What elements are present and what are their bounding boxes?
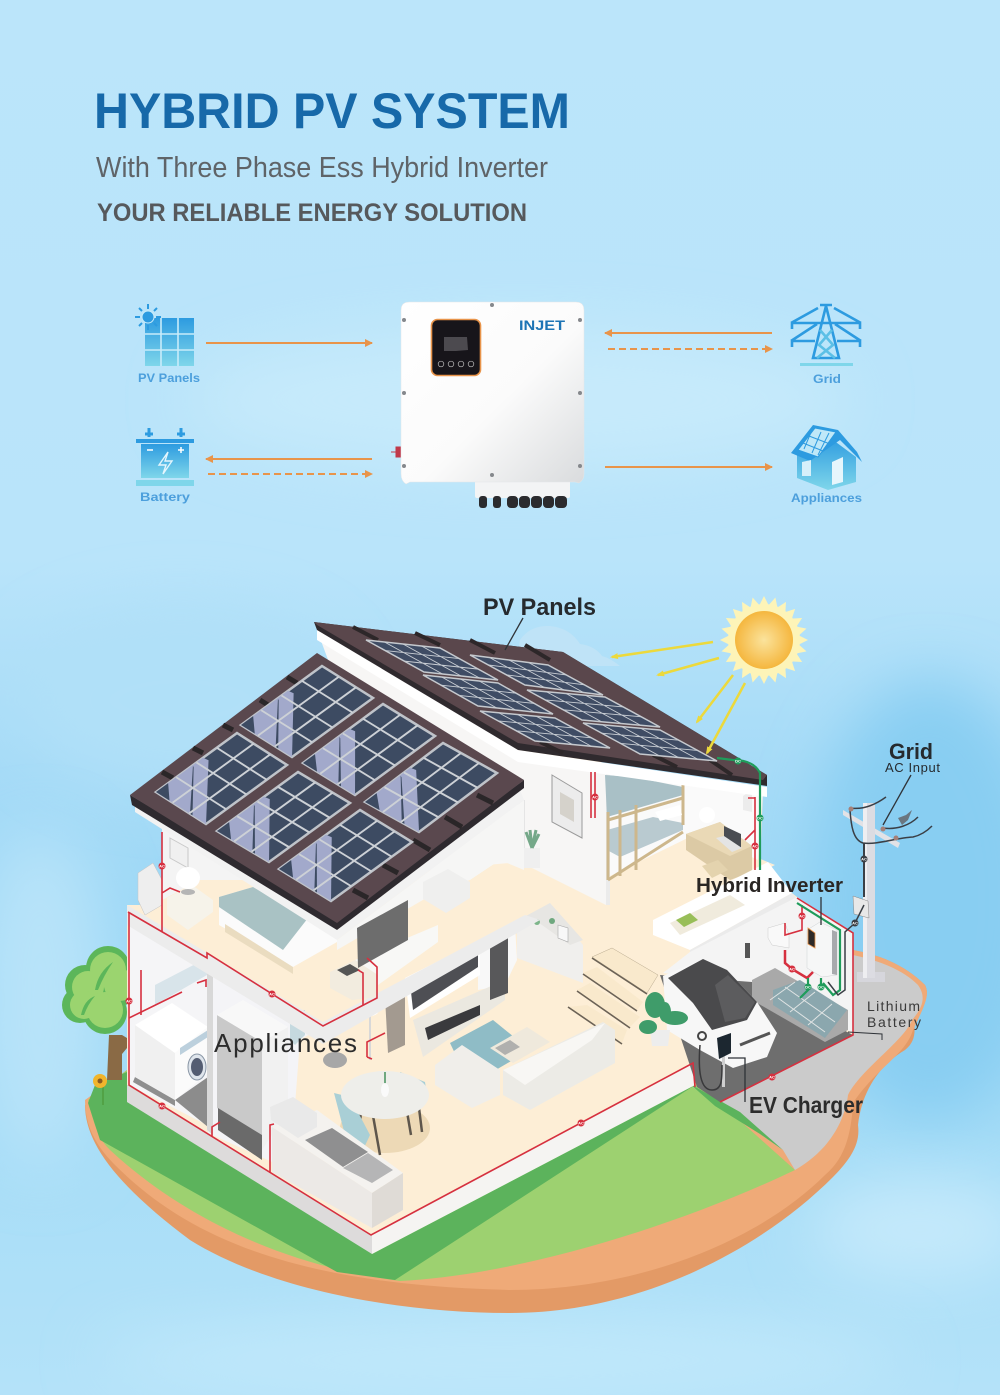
inverter unit	[391, 302, 584, 508]
wire badges: AC	[752, 844, 758, 848]
picture frame	[552, 775, 582, 838]
meter	[853, 896, 869, 918]
armchair sofa	[435, 1045, 500, 1108]
cabinets	[500, 903, 583, 983]
wire badges: AC	[159, 864, 165, 868]
robot vacuum	[323, 1052, 347, 1068]
wire badges: DC	[818, 984, 824, 990]
tagline: YOUR RELIABLE ENERGY SOLUTION	[97, 199, 527, 227]
arrow: battery to inverter dashed	[208, 473, 372, 475]
red wiring	[128, 772, 853, 1235]
grid wires	[850, 797, 932, 897]
grass	[88, 1070, 795, 1281]
illustration: floating island house	[62, 594, 940, 1313]
utility pole	[843, 797, 932, 982]
subtitle: With Three Phase Ess Hybrid Inverter	[96, 152, 548, 184]
label: Lithium Battery: Lithium	[867, 998, 920, 1014]
fridge room	[207, 953, 323, 1170]
wire badges: AC	[578, 1120, 584, 1126]
stairs	[568, 948, 658, 1044]
back walls	[162, 630, 763, 950]
label: Battery: Battery	[140, 490, 190, 504]
nightstand	[423, 869, 470, 913]
solar panels: front roof	[156, 666, 497, 901]
fridge	[217, 1000, 288, 1160]
white wall behind media	[478, 925, 517, 990]
wire badges: DC	[757, 816, 763, 820]
icon: solar house	[791, 425, 862, 490]
nightstand left	[167, 885, 213, 930]
water filter	[290, 1010, 305, 1045]
wire badges: AC	[852, 920, 858, 926]
arrow: inverter to grid dashed	[608, 348, 772, 350]
arrow: PV to inverter	[206, 342, 372, 344]
label: Grid: Grid	[889, 739, 933, 764]
car	[663, 959, 777, 1068]
long sofa	[503, 1022, 615, 1110]
sun	[720, 596, 808, 684]
wall plant	[524, 830, 540, 868]
wire badges: AC	[799, 914, 805, 918]
wire badges: AC	[861, 856, 867, 862]
left wall picture	[170, 838, 188, 868]
flower	[93, 1074, 107, 1105]
label: Grid: Grid	[813, 372, 841, 386]
floors	[127, 700, 853, 1235]
lithium battery	[752, 968, 848, 1042]
coffee table	[490, 1027, 550, 1063]
label: Appliances: Appliances	[214, 1028, 357, 1058]
icon: battery	[136, 428, 194, 486]
media wall	[405, 940, 505, 1057]
brand: INJET	[519, 317, 566, 333]
driveway	[660, 975, 853, 1102]
label: Lithium Battery	[867, 998, 921, 1030]
label: EV Charger: EV Charger	[749, 1092, 863, 1118]
title: HYBRID PV SYSTEM	[94, 83, 570, 139]
label: AC Input: AC Input	[885, 760, 940, 775]
wire badges: AC	[769, 1074, 775, 1080]
floor lamp	[361, 1004, 379, 1060]
label: PV Panels: PV Panels	[483, 594, 596, 621]
label: PV Panels: PV Panels	[138, 371, 200, 385]
lamp	[176, 867, 200, 895]
back roof	[314, 622, 767, 786]
front roof	[130, 653, 524, 940]
left wall under eave	[162, 825, 337, 940]
wall AC	[743, 790, 752, 812]
plant by car	[639, 992, 688, 1046]
microwave	[270, 1097, 317, 1138]
arrow: inverter to appliances	[605, 466, 772, 468]
leader lines	[505, 618, 911, 1102]
label: Hybrid Inverter: Hybrid Inverter	[696, 875, 843, 897]
dark wiring	[828, 905, 864, 995]
garage wall	[663, 897, 853, 1033]
bedroom	[138, 863, 337, 974]
dining set	[334, 1071, 430, 1155]
wall unit box	[768, 923, 789, 948]
outer low walls	[127, 1063, 695, 1254]
living room rug	[450, 1020, 530, 1085]
wire badges: AC	[269, 992, 275, 996]
bird	[898, 810, 912, 825]
TV and stand	[330, 900, 438, 1000]
icon: PV panels	[135, 304, 194, 366]
tree	[62, 946, 142, 1080]
upper wall band	[127, 905, 540, 1044]
speakers	[385, 935, 508, 1053]
kitchen counter	[270, 1097, 403, 1228]
driveway ground	[690, 955, 923, 1170]
wire badges: AC	[592, 794, 598, 800]
desk	[686, 807, 752, 880]
washing machine	[135, 1003, 208, 1100]
wire badges: DC	[805, 984, 811, 990]
cloud	[515, 626, 620, 666]
garage meter	[745, 943, 750, 958]
balcony wall and bench	[653, 862, 797, 960]
wire badges: DC	[735, 758, 741, 764]
bunk bed	[605, 775, 683, 880]
small hybrid inverter	[807, 922, 837, 977]
wall under front eave	[337, 800, 524, 950]
wire badges: AC	[159, 1104, 165, 1108]
EV charger	[698, 1032, 731, 1090]
wire badges: AC	[126, 998, 132, 1004]
laundry room	[129, 912, 208, 1127]
sun rays	[612, 642, 745, 753]
wire badges	[126, 758, 868, 1126]
wire badges: AC	[789, 966, 795, 972]
arrow: grid to inverter	[605, 332, 772, 334]
arrow: inverter to battery	[206, 458, 372, 460]
inverter screen	[432, 320, 480, 376]
icon: grid tower	[791, 305, 861, 364]
flow diagram	[135, 302, 862, 508]
outdoor AC	[138, 863, 162, 915]
label: Appliances: Appliances	[791, 491, 862, 505]
green wiring	[717, 758, 840, 998]
label: Lithium Battery: Battery	[867, 1014, 921, 1030]
AC and DC wiring	[128, 758, 864, 1235]
bed	[219, 887, 337, 974]
island base	[85, 950, 927, 1313]
rear roof walls	[317, 628, 767, 797]
